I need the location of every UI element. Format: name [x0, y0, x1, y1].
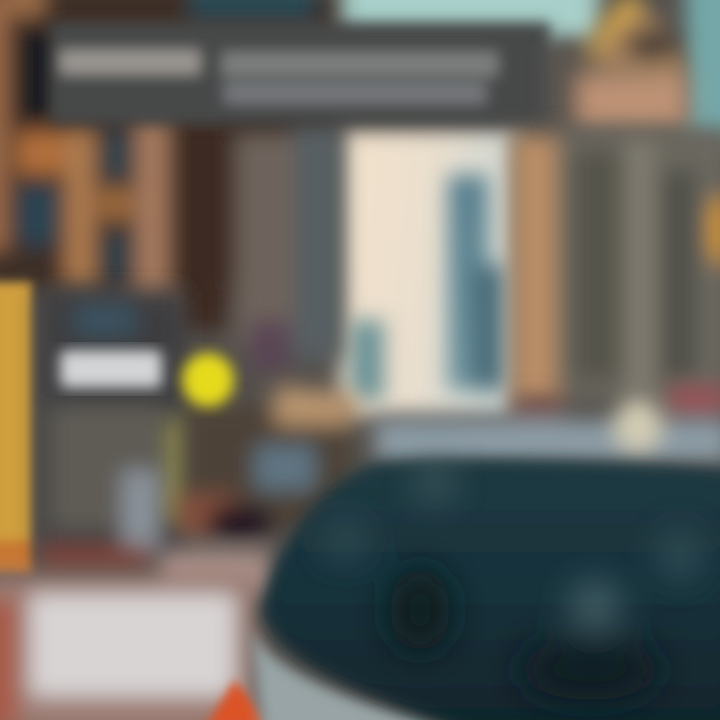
red tail light: [205, 680, 272, 720]
banner text left: [60, 50, 200, 74]
domed tower: [550, 0, 688, 130]
car reflections: [325, 466, 700, 700]
right building: [512, 128, 720, 405]
sky backdrop: [300, 0, 720, 415]
banner text right: [222, 52, 498, 76]
dark storefront: [40, 290, 190, 569]
distant street band: [375, 385, 720, 462]
storefront sign: [60, 350, 162, 388]
lower street details: [160, 385, 360, 595]
banner: [50, 22, 550, 124]
distant skyscraper: [350, 175, 506, 400]
car silver trim: [250, 625, 480, 720]
dark teal car: [262, 460, 720, 720]
left building: [0, 0, 342, 370]
yellow column at left edge: [0, 282, 32, 574]
yellow round sign: [182, 353, 234, 407]
white road area: [0, 575, 255, 720]
